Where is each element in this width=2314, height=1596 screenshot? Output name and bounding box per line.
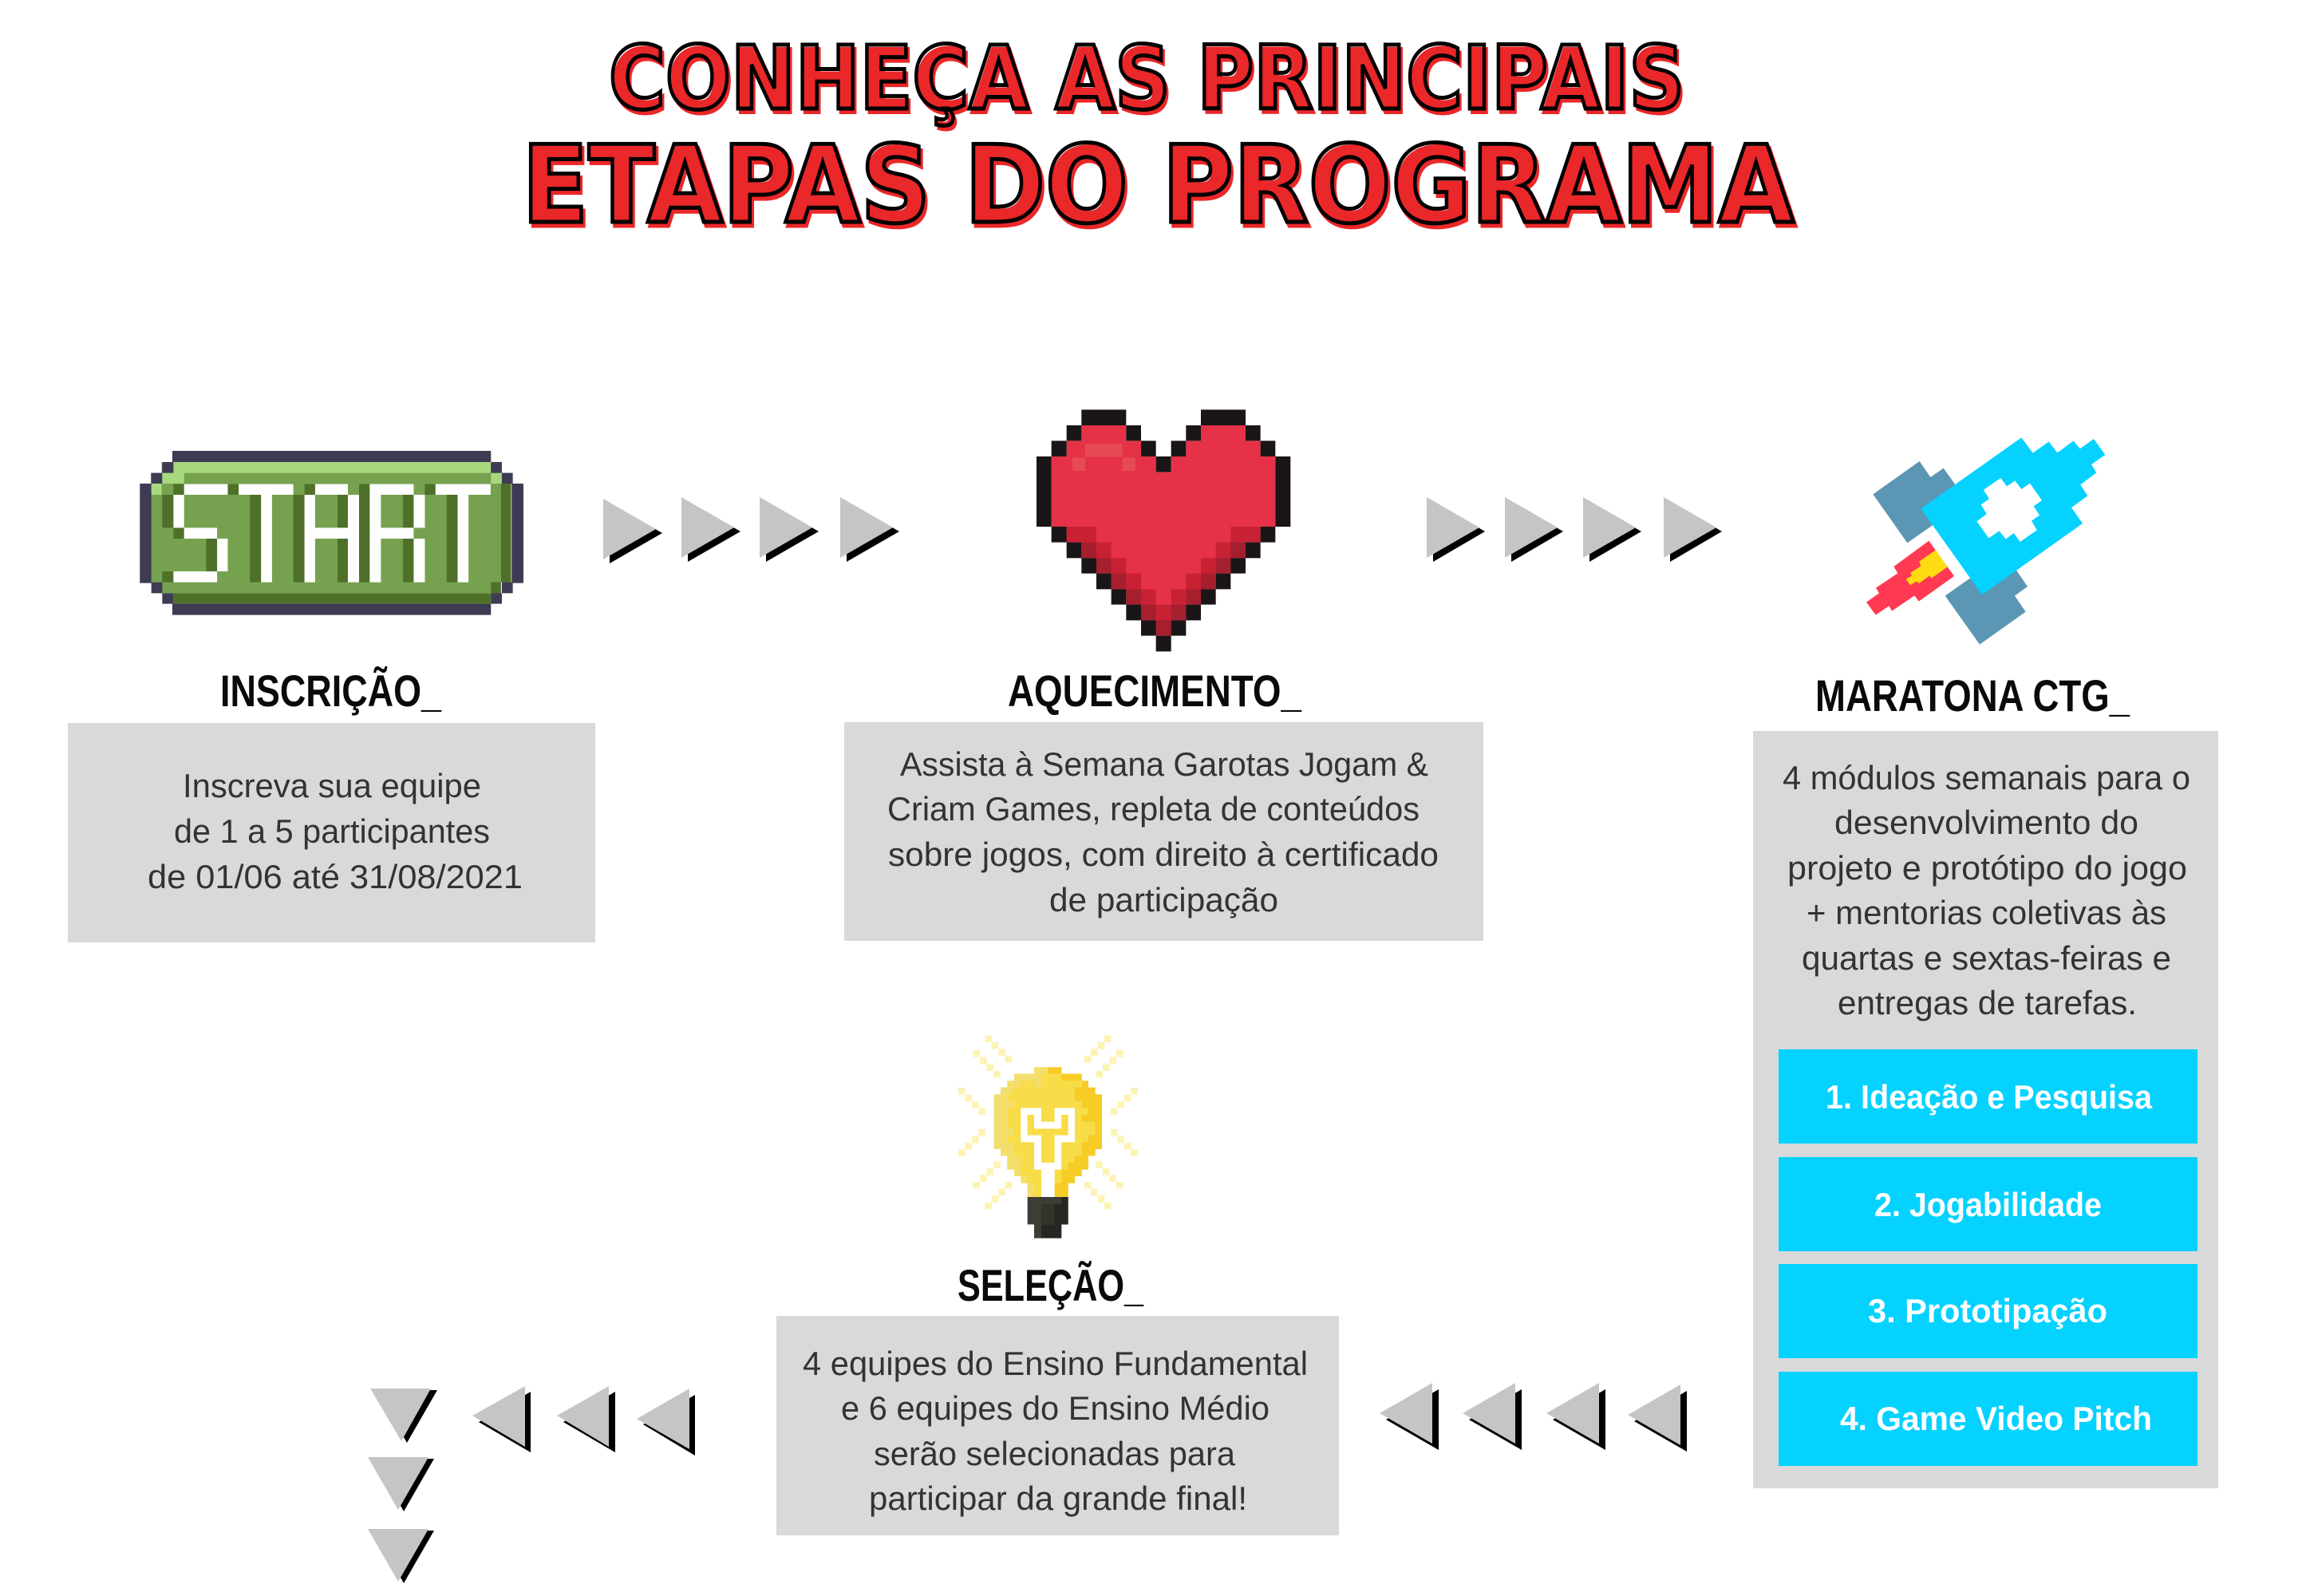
module 3 (1779, 1264, 2198, 1358)
panel: seleção: serão selecionadas para (874, 1435, 1236, 1472)
heading: inscrição: INSCRIÇÃO_ (220, 666, 442, 716)
icon: pixel heart (1037, 409, 1290, 651)
arrows: start to heart (603, 497, 899, 563)
panel: maratona ctg: desenvolvimento do (1834, 804, 2138, 841)
arrows: heart to rocket (1427, 497, 1722, 562)
panel: seleção (776, 1316, 1339, 1535)
panel: seleção: e 6 equipes do Ensino Médio (841, 1389, 1270, 1427)
module 4: 4. Game Video Pitch (1840, 1400, 2152, 1437)
module 2: 2. Jogabilidade (1874, 1186, 2102, 1223)
title: CONHEÇA AS PRINCIPAIS (611, 31, 1687, 133)
module 3: 3. Prototipação (1868, 1292, 2107, 1329)
title (522, 27, 1796, 251)
module 1: 1. Ideação e Pesquisa (1826, 1078, 2153, 1116)
icon: pixel rocket (1866, 437, 2105, 645)
module 4 (1779, 1372, 2198, 1466)
module 1 (1779, 1049, 2198, 1144)
panel: inscrição: de 1 a 5 participantes (174, 812, 490, 850)
module 2 (1779, 1157, 2198, 1251)
panel: seleção: 4 equipes do Ensino Fundamental (803, 1345, 1308, 1382)
panel: aquecimento: Criam Games, repleta de conteúdos (887, 790, 1420, 828)
arrows: seleção leftwards (472, 1386, 695, 1456)
panel: aquecimento: de participação (1049, 881, 1278, 918)
panel: maratona ctg: quartas e sextas-feiras e (1802, 939, 2171, 977)
panel: maratona ctg: + mentorias coletivas às (1807, 894, 2166, 931)
panel: maratona ctg: entregas de tarefas. (1838, 984, 2137, 1021)
panel: maratona ctg: projeto e protótipo do jogo (1787, 849, 2187, 887)
icon: pixel light bulb (958, 1035, 1138, 1238)
arrows: downwards (368, 1389, 437, 1583)
panel: aquecimento: sobre jogos, com direito à certificado (888, 836, 1439, 873)
panel: maratona ctg: 4 módulos semanais para o (1783, 759, 2190, 796)
title: ETAPAS DO PROGRAMA (524, 127, 1796, 251)
title: ETAPAS DO PROGRAMA (522, 123, 1794, 247)
panel: inscrição: de 01/06 até 31/08/2021 (148, 858, 523, 895)
arrows: maratona to seleção (1380, 1383, 1687, 1452)
heading: aquecimento: AQUECIMENTO_ (1008, 666, 1302, 716)
heading: maratona ctg: MARATONA CTG_ (1815, 670, 2130, 721)
panel: aquecimento (844, 722, 1483, 941)
panel: inscrição (68, 723, 595, 942)
icon: start button (140, 451, 523, 615)
panel: aquecimento: Assista à Semana Garotas Jogam & (900, 745, 1428, 783)
panel: seleção: participar da grande final! (869, 1479, 1247, 1517)
panel: inscrição: Inscreva sua equipe (183, 767, 481, 804)
heading: seleção: SELEÇÃO_ (958, 1260, 1144, 1310)
panel: maratona ctg (1753, 731, 2218, 1488)
title: CONHEÇA AS PRINCIPAIS (609, 27, 1684, 129)
